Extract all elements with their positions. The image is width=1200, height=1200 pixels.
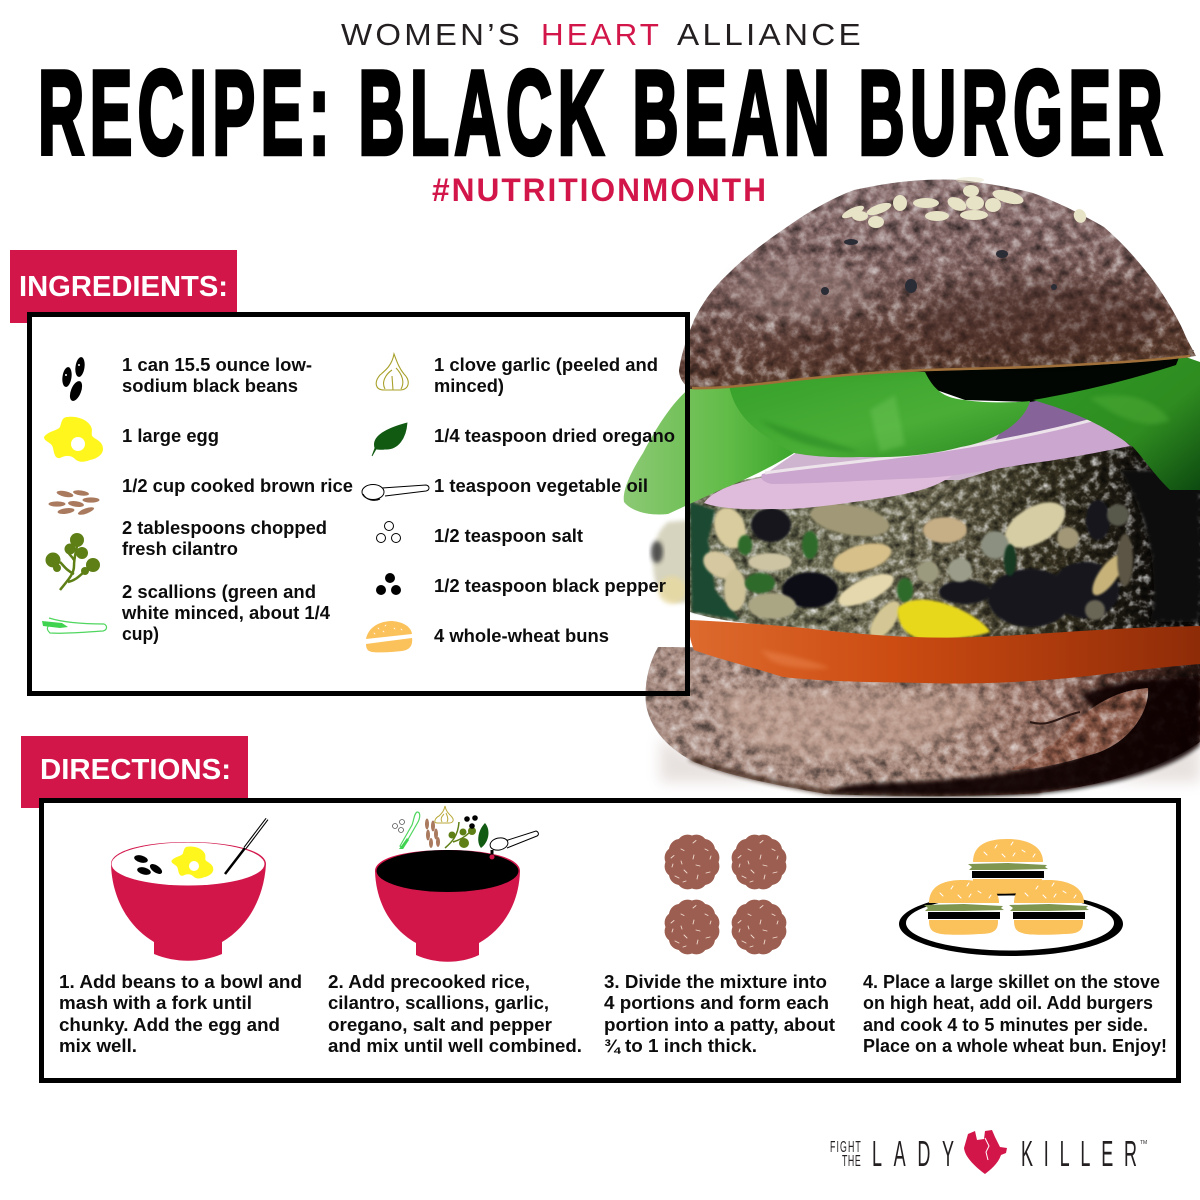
ingredient: beans (122, 354, 312, 396)
step 2 text: 2. Add precooked rice, (328, 971, 530, 992)
step 4 text: and cook 4 to 5 minutes per side. (863, 1014, 1148, 1035)
step 1 text (59, 971, 302, 1056)
heading: organisation name (341, 18, 864, 52)
step 4 text: Place on a whole wheat bun. Enjoy! (863, 1035, 1167, 1056)
icon: salt (376, 522, 400, 542)
upper onion ring (761, 420, 1130, 484)
step 1 illustration: bowl with beans, egg and fork (111, 819, 267, 961)
shadow under bun (720, 350, 1194, 402)
step 1 text: mash with a fork until (59, 992, 252, 1013)
ingredient: beans: 1 can 15.5 ounce low- (122, 354, 312, 375)
hashtag: #NUTRITIONMONTH (432, 172, 768, 208)
icon: brown rice (48, 489, 100, 516)
ingredient: pepper: 1/2 teaspoon black pepper (434, 575, 666, 596)
ingredient: salt: 1/2 teaspoon salt (434, 525, 583, 546)
step 1 text: chunky. Add the egg and (59, 1014, 280, 1035)
ingredient: vegetable oil: 1 teaspoon vegetable oil (434, 475, 648, 496)
step 3 text: 3. Divide the mixture into (604, 971, 827, 992)
ingredient: cilantro: fresh cilantro (122, 538, 238, 559)
step 3 text (604, 971, 835, 1056)
step 1 text: mix well. (59, 1035, 137, 1056)
ingredients panel frame (30, 314, 688, 694)
icon: bun (366, 621, 412, 652)
icon: spoon (362, 484, 429, 500)
bottom bun (646, 647, 1200, 796)
icon: black beans (61, 356, 86, 403)
logo: Fight the Lady Killer: KILLER (1021, 1134, 1137, 1175)
patty oats and grains (698, 493, 1133, 644)
icon: cilantro (46, 533, 100, 590)
step 2 text: oregano, salt and pepper (328, 1014, 552, 1035)
lower onion ring (704, 474, 954, 509)
step 2 text: and mix until well combined. (328, 1035, 582, 1056)
heading: organisation name: HEART (541, 18, 662, 52)
icon: black pepper (376, 573, 401, 595)
ingredient: egg: 1 large egg (122, 425, 219, 446)
directions panel (42, 800, 1178, 1080)
ingredient: beans: sodium black beans (122, 375, 298, 396)
logo: Fight the Lady Killer: TM (1140, 1140, 1147, 1146)
step 2 text: cilantro, scallions, garlic, (328, 992, 549, 1013)
ingredient: scallions: white minced, about 1/4 (121, 602, 331, 623)
step 4 text: on high heat, add oil. Add burgers (863, 992, 1153, 1013)
ingredient: oregano: 1/4 teaspoon dried oregano (434, 425, 675, 446)
logo: Fight the Lady Killer: LADY (872, 1134, 954, 1175)
back spinach leaf (624, 384, 794, 514)
ingredients list: right column (362, 354, 675, 652)
front spinach leaf (729, 371, 1030, 457)
ingredient: scallions: 2 scallions (green and (122, 581, 316, 602)
icon: garlic (376, 354, 408, 390)
heading: organisation name: ALLIANCE (677, 18, 864, 52)
step 4 text: 4. Place a large skillet on the stove (863, 971, 1160, 992)
ingredient: scallions (121, 581, 331, 644)
ingredient: garlic: 1 clove garlic (peeled and (434, 354, 658, 375)
top bun (679, 179, 1196, 389)
step 3 illustration: four patties (665, 835, 786, 954)
ingredient: scallions: cup) (122, 623, 159, 644)
ingredient: cilantro (122, 517, 327, 559)
yellow pepper (898, 600, 990, 640)
ingredients heading tab (10, 250, 237, 323)
directions heading tab (21, 736, 248, 808)
tomato slice (689, 620, 1200, 683)
heading: organisation name: WOMEN’S (341, 18, 523, 52)
logo: Fight the Lady Killer (830, 1130, 1147, 1175)
step 3 text: 4 portions and form each (604, 992, 829, 1013)
icon: egg (44, 417, 103, 462)
logo: Fight the Lady Killer: THE (842, 1151, 861, 1170)
ingredient: buns: 4 whole-wheat buns (434, 625, 609, 646)
step 4 text (863, 971, 1167, 1056)
ingredient: rice: 1/2 cup cooked brown rice (122, 475, 353, 496)
step 1 text: 1. Add beans to a bowl and (59, 971, 302, 992)
step 4 illustration: burgers on a plate (899, 839, 1123, 956)
ingredient: cilantro: 2 tablespoons chopped (122, 517, 327, 538)
purple back onion (990, 395, 1110, 448)
patty beans (751, 500, 1119, 627)
icon: scallion (42, 618, 107, 633)
ingredients heading tab: INGREDIENTS: (19, 271, 228, 303)
step 2 illustration: bowl with ingredients and spoon (375, 806, 538, 962)
patty greens (738, 531, 1016, 602)
ingredients panel background (29, 314, 688, 694)
sesame seeds (840, 177, 1088, 228)
step 2 text (328, 971, 582, 1056)
ingredient: garlic: minced) (434, 375, 504, 396)
ingredients list: left column (42, 354, 353, 644)
patty (651, 430, 1200, 644)
directions heading tab: DIRECTIONS: (40, 754, 231, 786)
pale onion backing (768, 420, 1060, 480)
step 3 text: ¾ to 1 inch thick. (604, 1035, 757, 1056)
logo: Fight the Lady Killer: FIGHT (830, 1137, 861, 1156)
burger photo illustration (624, 177, 1200, 796)
icon: anatomical heart (964, 1130, 1007, 1174)
step 3 text: portion into a patty, about (604, 1014, 835, 1035)
icon: oregano leaf (372, 423, 407, 456)
right spinach leaf (1033, 355, 1200, 490)
ingredient: garlic (434, 354, 658, 396)
